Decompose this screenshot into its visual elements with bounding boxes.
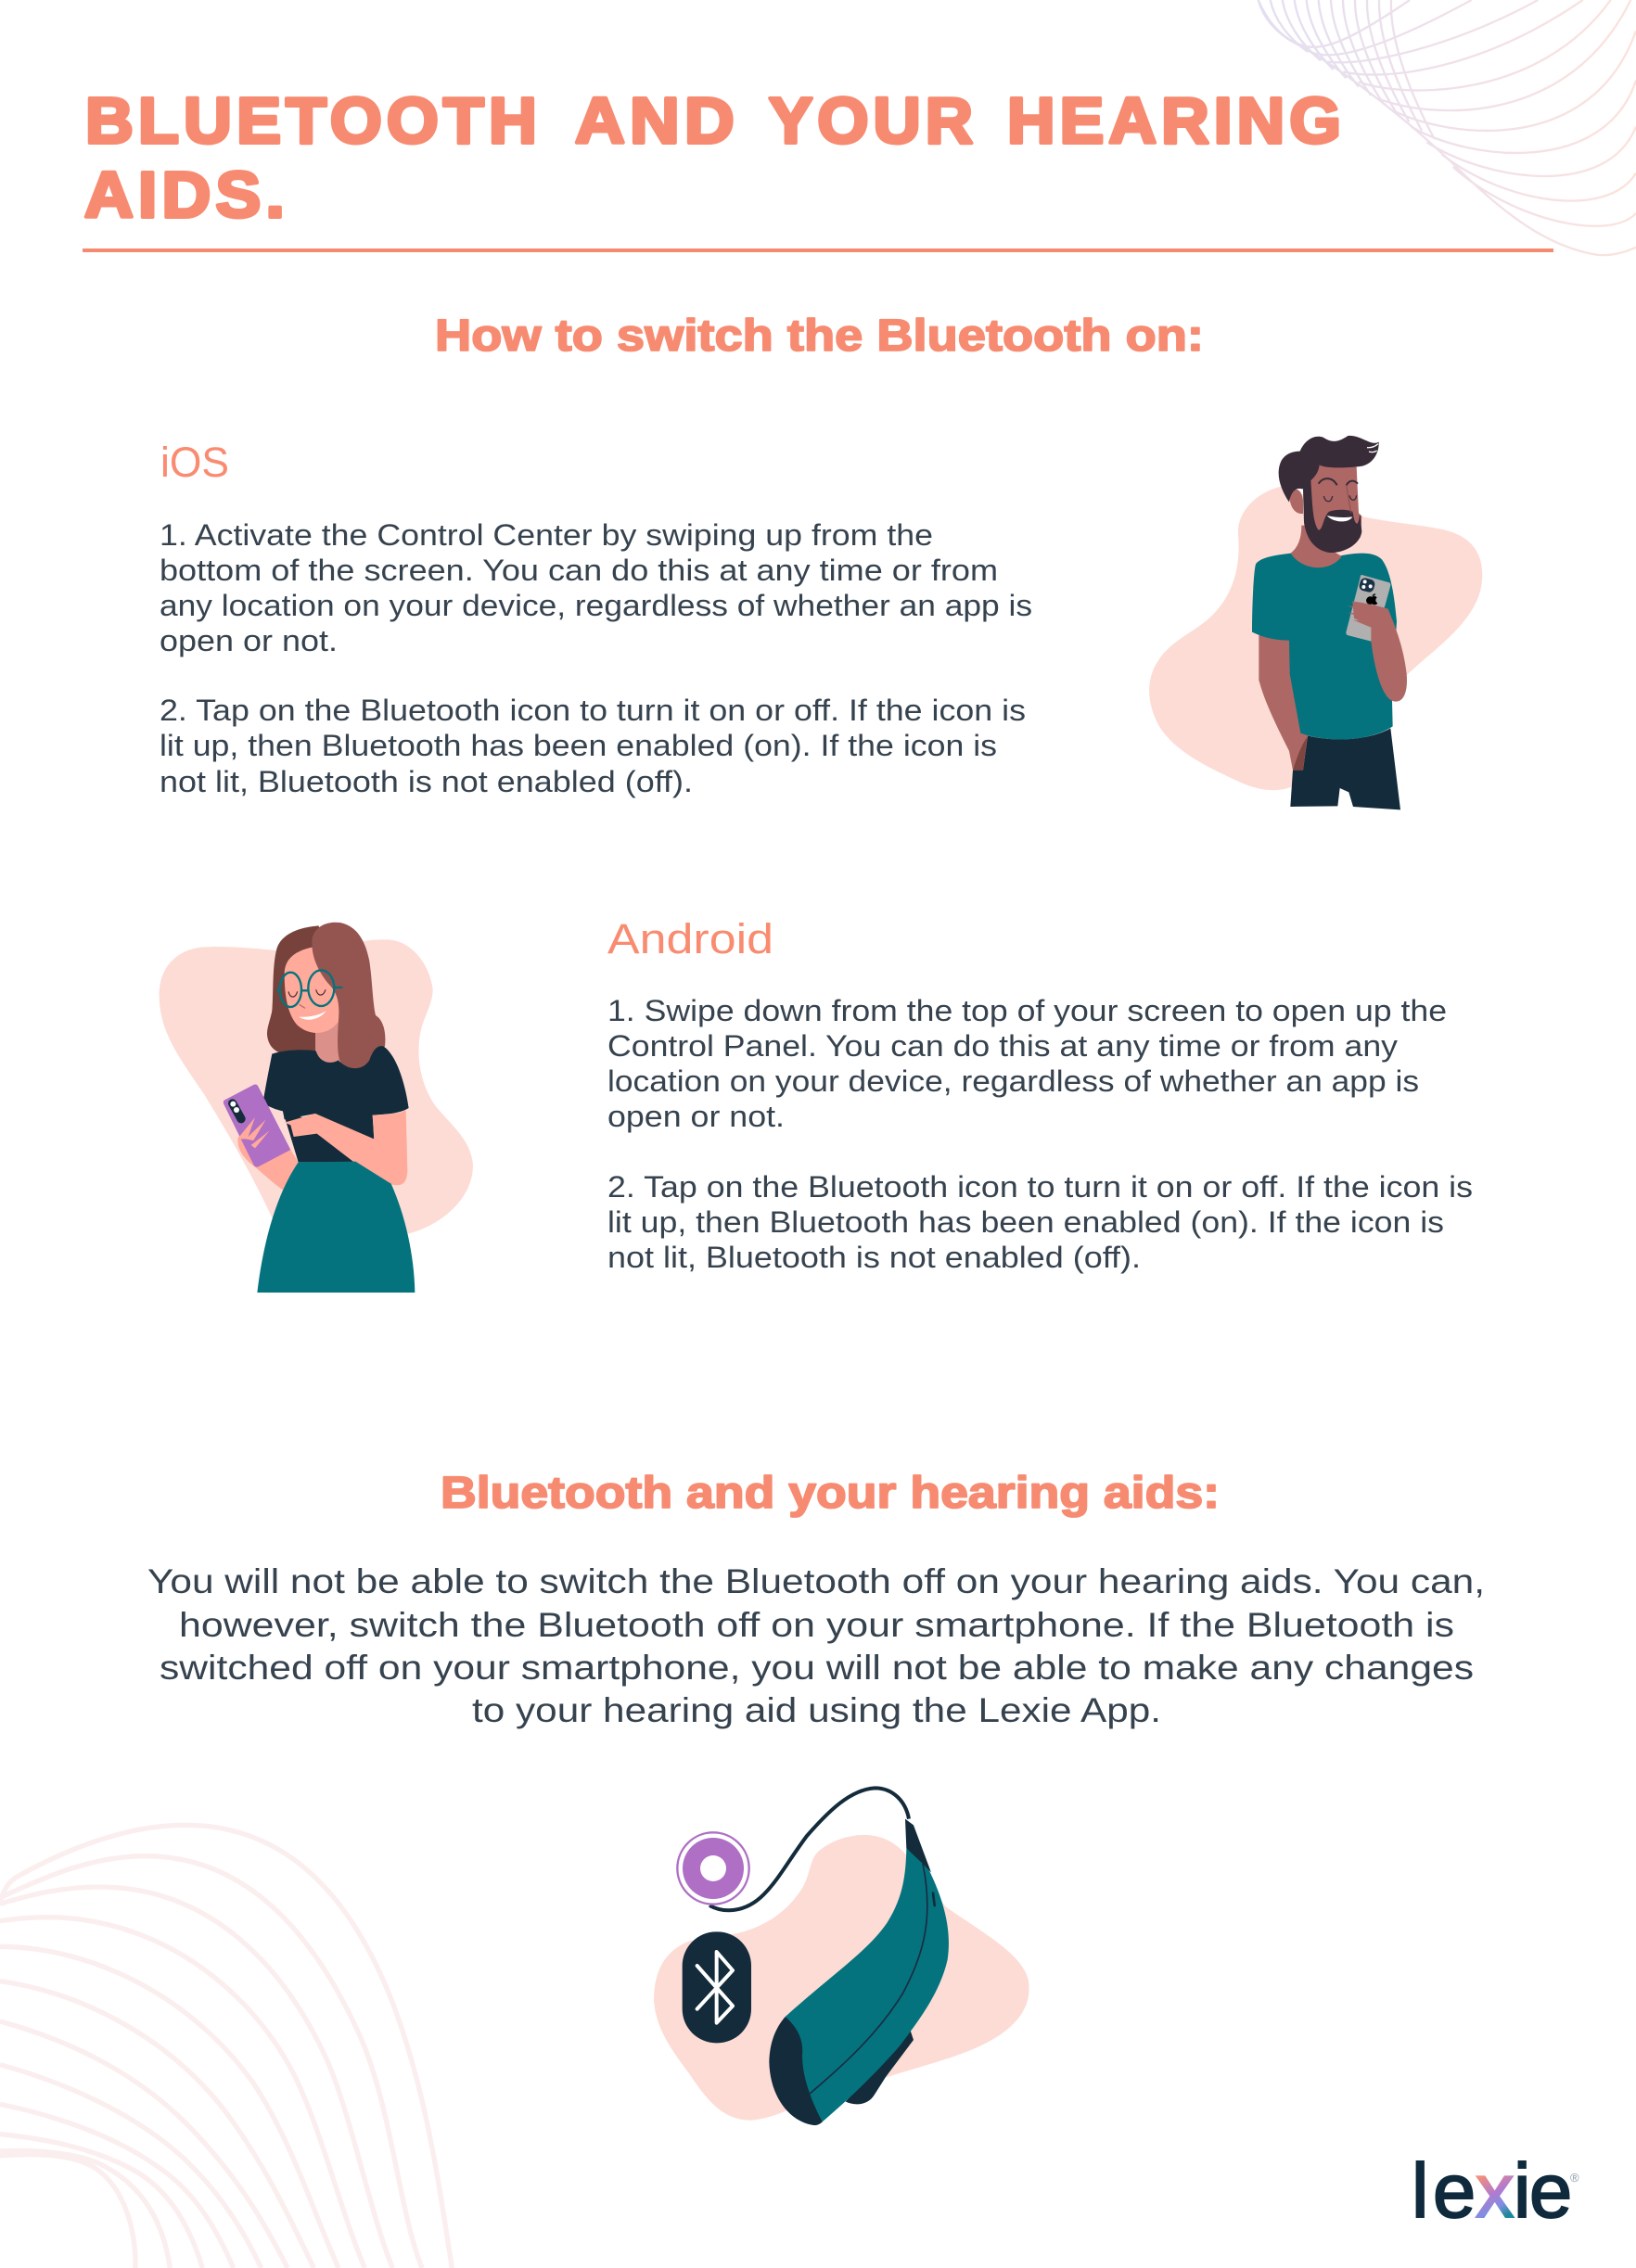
illustration: man with phone [1149, 436, 1482, 809]
text block: Android steps: location on your device, regardless of whether an app is [607, 1064, 1419, 1098]
title: AIDS. [84, 159, 289, 231]
text block: hearing aid explanation: switched off on your smartphone, you will not be able to make any changes [160, 1649, 1474, 1687]
illustration: hearing aid with Bluetooth icon [654, 1788, 1029, 2125]
text block: Android steps [607, 994, 1473, 1274]
text block: iOS steps [160, 518, 1032, 798]
title: YOUR [769, 84, 978, 157]
text block: hearing aid explanation [147, 1562, 1485, 1729]
panel: Android instructions [607, 915, 1473, 1274]
text block: iOS steps: not lit, Bluetooth is not enabled (off). [160, 765, 693, 798]
title [84, 84, 1346, 231]
text block: iOS steps: open or not. [160, 624, 338, 657]
text block: Android steps: 2. Tap on the Bluetooth icon to turn it on or off. If the icon is [607, 1170, 1473, 1204]
text block: iOS steps: any location on your device, regardless of whether an app is [160, 589, 1032, 622]
heading: iOS: iOS [160, 439, 229, 486]
title: BLUETOOTH [85, 84, 542, 157]
text block: Android steps: lit up, then Bluetooth has been enabled (on). If the icon is [607, 1205, 1444, 1239]
logo: lexie: lexie [1412, 2147, 1572, 2234]
text block: hearing aid explanation: however, switch the Bluetooth off on your smartphone. If the Bluetooth is [179, 1606, 1454, 1644]
heading: how to switch the Bluetooth on: How to switch the Bluetooth on: [435, 312, 1204, 361]
text block: iOS steps: bottom of the screen. You can do this at any time or from [160, 554, 998, 587]
panel: iOS instructions [160, 439, 1032, 798]
title: HEARING [1007, 84, 1346, 157]
text block: Android steps: open or not. [607, 1100, 785, 1133]
title: AND [575, 84, 739, 157]
text block: Android steps: not lit, Bluetooth is not enabled (off). [607, 1241, 1141, 1274]
text block: hearing aid explanation: You will not be able to switch the Bluetooth off on your hearing aids. You can, [147, 1562, 1485, 1600]
text block: Android steps: 1. Swipe down from the top of your screen to open up the [607, 994, 1447, 1027]
illustration: woman with phone [160, 923, 473, 1293]
text block: hearing aid explanation: to your hearing aid using the Lexie App. [472, 1691, 1161, 1729]
text block: Android steps: Control Panel. You can do this at any time or from any [607, 1029, 1398, 1063]
heading: Android: Android [607, 915, 773, 962]
icon: Bluetooth [683, 1931, 751, 2043]
icon: purple disc [677, 1832, 749, 1905]
text block: iOS steps: 1. Activate the Control Center by swiping up from the [160, 518, 933, 552]
logo: lexie: ® [1570, 2171, 1579, 2185]
text block: iOS steps: lit up, then Bluetooth has been enabled (on). If the icon is [160, 729, 997, 762]
heading: Bluetooth and your hearing aids: Bluetooth and your hearing aids: [441, 1469, 1220, 1518]
text block: iOS steps: 2. Tap on the Bluetooth icon to turn it on or off. If the icon is [160, 694, 1026, 727]
